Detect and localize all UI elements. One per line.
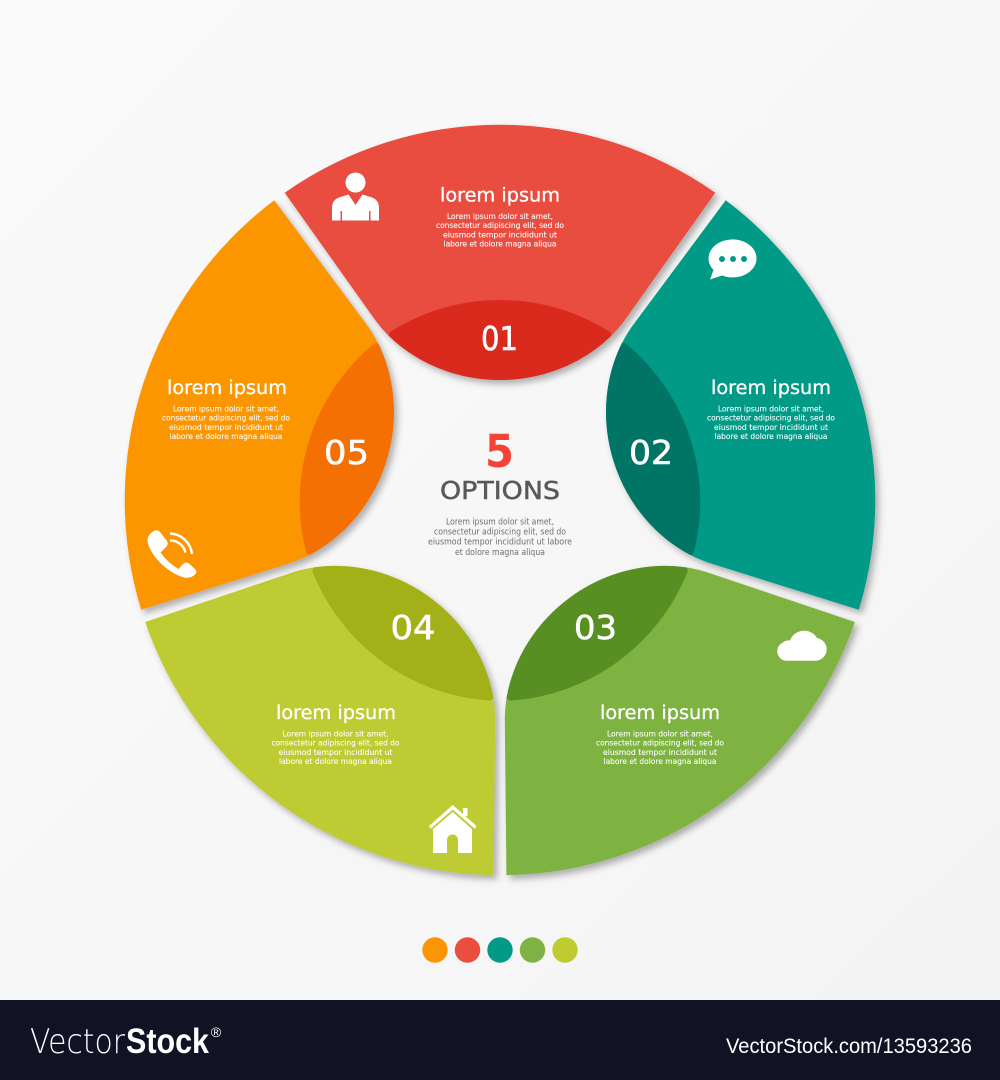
- text block 05: [162, 404, 290, 441]
- center text block: consectetur adipiscing elit, sed do: [434, 526, 566, 536]
- number cap 03: [506, 566, 688, 700]
- number 03: 03: [574, 608, 617, 647]
- footer logo: [30, 1022, 222, 1062]
- text block 01: Lorem ipsum dolor sit amet,: [447, 211, 553, 221]
- text block 05: Lorem ipsum dolor sit amet,: [173, 404, 279, 414]
- text block 04: labore et dolore magna aliqua: [279, 756, 392, 766]
- text block 04: consectetur adipiscing elit, sed do: [272, 738, 400, 748]
- footer url: VectorStock.com/13593236: [726, 1035, 972, 1058]
- text block 05: consectetur adipiscing elit, sed do: [162, 412, 290, 422]
- text block 03: [596, 728, 724, 766]
- number 01: 01: [481, 319, 518, 358]
- text block 04: Lorem ipsum dolor sit amet,: [282, 728, 388, 738]
- petal 01: [285, 125, 715, 380]
- number 02: 02: [629, 433, 673, 472]
- text block 02: [707, 404, 835, 441]
- icon: cloud: [777, 631, 827, 661]
- petal 05: [77, 179, 452, 668]
- number cap 02: [606, 343, 700, 556]
- legend dots: [422, 937, 578, 963]
- heading 05: lorem ipsum: [167, 378, 287, 399]
- heading 04: lorem ipsum: [276, 703, 396, 724]
- text block 03: labore et dolore magna aliqua: [604, 756, 716, 766]
- text block 04: eiusmod tempor incididunt ut: [278, 747, 393, 757]
- center text block: Lorem ipsum dolor sit amet,: [446, 516, 554, 526]
- icon: phone: [148, 530, 196, 578]
- text block 05: labore et dolore magna aliqua: [170, 431, 282, 441]
- center text block: [428, 516, 572, 557]
- icon: speech bubble: [709, 239, 757, 280]
- number cap 05: [300, 343, 394, 556]
- icon: person: [332, 172, 379, 220]
- petal 03: [396, 471, 895, 930]
- footer bar: [0, 1000, 1000, 1080]
- number 05: 05: [324, 433, 369, 472]
- number cap 01: [388, 300, 612, 380]
- petal 02: [548, 179, 923, 668]
- text block 03: eiusmod tempor incididunt ut: [603, 747, 718, 757]
- text block 03: Lorem ipsum dolor sit amet,: [607, 728, 713, 738]
- panel: option 05: [124, 200, 402, 616]
- heading 02: lorem ipsum: [711, 378, 831, 399]
- footer logo: Vector: [30, 1022, 125, 1062]
- heading 03: lorem ipsum: [600, 703, 720, 724]
- text block 02: eiusmod tempor incididunt ut: [714, 422, 829, 432]
- center text block: eiusmod tempor incididunt ut labore: [428, 536, 572, 546]
- panel: option 03: [504, 566, 861, 883]
- number 04: 04: [390, 608, 436, 647]
- footer logo: ®: [211, 1024, 222, 1040]
- text block 01: consectetur adipiscing elit, sed do: [436, 220, 564, 230]
- icon: house: [429, 805, 476, 853]
- center text block: et dolore magna aliqua: [455, 547, 545, 557]
- text block 04: [272, 728, 400, 766]
- panel: option 04: [145, 566, 502, 883]
- center heading OPTIONS: OPTIONS: [440, 476, 560, 505]
- text block 01: [436, 211, 564, 248]
- text block 01: labore et dolore magna aliqua: [444, 238, 556, 248]
- footer logo: Stock: [126, 1022, 209, 1061]
- panel: option 01: [285, 125, 715, 400]
- text block 02: consectetur adipiscing elit, sed do: [707, 412, 835, 422]
- text block 03: consectetur adipiscing elit, sed do: [596, 738, 724, 748]
- text block 01: eiusmod tempor incididunt ut: [443, 230, 558, 240]
- text block 02: Lorem ipsum dolor sit amet,: [718, 404, 824, 414]
- petal 04: [105, 471, 604, 930]
- center number 5: 5: [485, 425, 514, 478]
- text block 02: labore et dolore magna aliqua: [714, 431, 828, 441]
- panel: option 02: [606, 200, 883, 616]
- text block 05: eiusmod tempor incididunt ut: [169, 422, 284, 432]
- number cap 04: [312, 566, 494, 700]
- heading 01: lorem ipsum: [440, 186, 560, 206]
